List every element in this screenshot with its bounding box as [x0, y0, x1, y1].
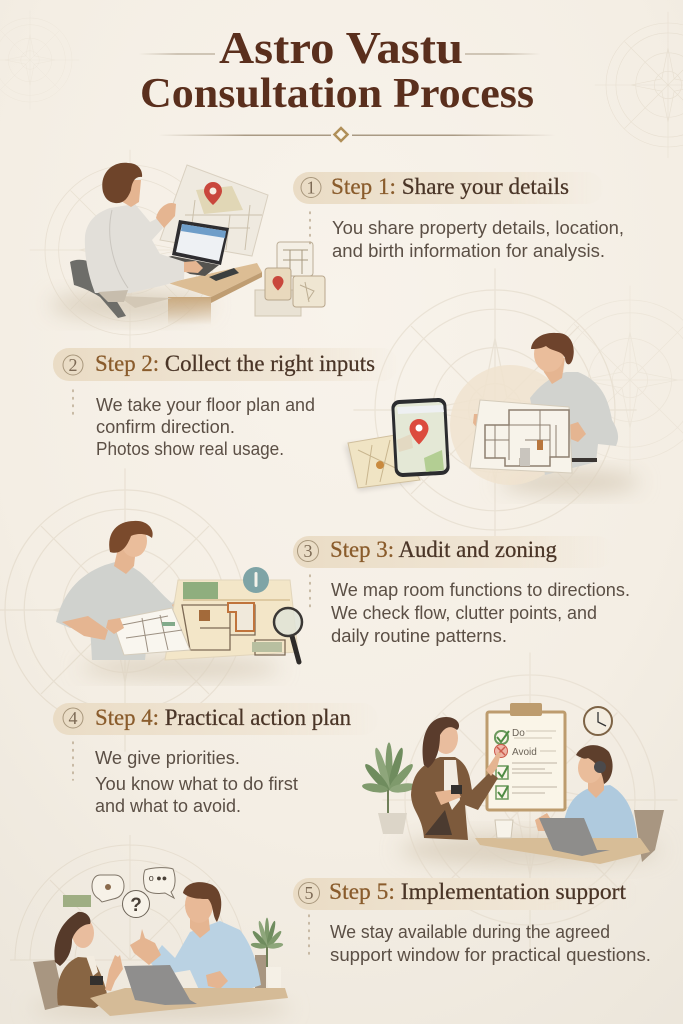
- woman: [411, 717, 501, 840]
- desk: [90, 988, 288, 1016]
- step 1 text: You share property details, location,: [332, 218, 624, 238]
- man: [56, 521, 192, 660]
- step 4 heading: [53, 703, 378, 735]
- panel: step 1: [50, 163, 624, 325]
- panel: step 2: [53, 333, 640, 494]
- step 1 heading: [293, 172, 603, 204]
- step 1 heading: Step 1: Share your details: [331, 174, 569, 199]
- step 5 text: We stay available during the agreed: [330, 922, 610, 942]
- title: Astro Vastu: [219, 22, 463, 73]
- magnifying glass: [274, 608, 302, 662]
- laptop: [160, 220, 239, 281]
- step 1 text: [332, 218, 624, 261]
- step 2 heading: 2: [68, 355, 78, 375]
- clipboard checklist: Do: [512, 728, 525, 739]
- step 1 heading: 1: [306, 178, 316, 198]
- illustration: consultant reviewing do and avoid checklist: [362, 703, 664, 866]
- illustration: man holding floor plan with phone and map: [345, 333, 640, 494]
- coffee mug: [495, 820, 513, 838]
- clipboard checklist: Avoid: [512, 747, 537, 758]
- step 3 connector dots: [309, 575, 311, 610]
- clipboard checklist: [487, 703, 565, 810]
- man: [473, 333, 618, 475]
- laptop: [124, 965, 197, 1005]
- step 3 text: daily routine patterns.: [331, 626, 507, 646]
- plant: [251, 918, 283, 989]
- speech bubbles: o ●●: [149, 873, 167, 883]
- chair: [634, 810, 664, 862]
- title: [139, 22, 540, 117]
- laptop: [539, 818, 610, 856]
- step 1 text: and birth information for analysis.: [332, 241, 605, 261]
- step 5 text: support window for practical questions.: [330, 945, 651, 965]
- step 4 heading: Step 4: Practical action plan: [95, 705, 351, 730]
- illustration: man at laptop with maps: [50, 163, 325, 325]
- speech bubbles: ?: [130, 895, 142, 916]
- panel: step 5: [30, 868, 651, 1018]
- man: [130, 882, 261, 992]
- hand sheet: [106, 608, 190, 655]
- step 2 heading: [53, 348, 398, 381]
- step 5 connector dots: [308, 915, 310, 955]
- speech bubbles: [63, 868, 175, 918]
- step 4 text: You know what to do first: [95, 774, 298, 794]
- step 3 text: We map room functions to directions.: [331, 580, 630, 600]
- man with headset: [535, 745, 638, 850]
- step 5 text: [330, 922, 651, 965]
- step 4 text: [95, 748, 298, 816]
- step 4 text: and what to avoid.: [95, 796, 241, 816]
- plant: [362, 742, 416, 834]
- man: [85, 163, 203, 302]
- step 4 connector dots: [72, 742, 74, 780]
- number badge: [243, 567, 269, 593]
- step 2 text: confirm direction.: [96, 417, 235, 437]
- panel: step 3: [56, 521, 630, 678]
- paper map: [160, 165, 268, 256]
- step 3 text: [331, 580, 630, 646]
- panel: step 4: [53, 703, 664, 866]
- woman: [54, 912, 123, 1008]
- step 3 text: We check flow, clutter points, and: [331, 603, 597, 623]
- step 5 heading: 5: [304, 883, 314, 903]
- chair: [70, 260, 126, 318]
- step 3 heading: Step 3: Audit and zoning: [330, 537, 557, 562]
- desk: [475, 838, 650, 864]
- step 2 heading: Step 2: Collect the right inputs: [95, 351, 375, 376]
- large floor plan: [165, 580, 298, 660]
- desk: [168, 297, 211, 325]
- phone with map pin: [391, 398, 450, 477]
- floor plan sheet: [470, 400, 572, 473]
- wall clock: [584, 707, 612, 735]
- illustration: man auditing a floor plan: [56, 521, 302, 678]
- step 4 heading: 4: [68, 708, 78, 728]
- paper map: [345, 435, 420, 491]
- title divider with diamond: [159, 128, 555, 141]
- illustration: two people talking with speech bubbles: [30, 868, 290, 1018]
- step 2 text: Photos show real usage.: [96, 439, 284, 459]
- step 2 text: We take your floor plan and: [96, 395, 315, 415]
- chairs: [33, 960, 65, 1010]
- document cards: [255, 242, 325, 316]
- step 1 connector dots: [309, 212, 311, 245]
- step 4 text: We give priorities.: [95, 748, 240, 768]
- title: Consultation Process: [140, 71, 534, 117]
- step 2 connector dots: [72, 390, 74, 420]
- step 5 heading: [293, 878, 638, 910]
- step 3 heading: [293, 536, 613, 568]
- step 5 heading: Step 5: Implementation support: [329, 879, 627, 904]
- step 3 heading: 3: [304, 541, 312, 561]
- step 2 text: [96, 395, 315, 459]
